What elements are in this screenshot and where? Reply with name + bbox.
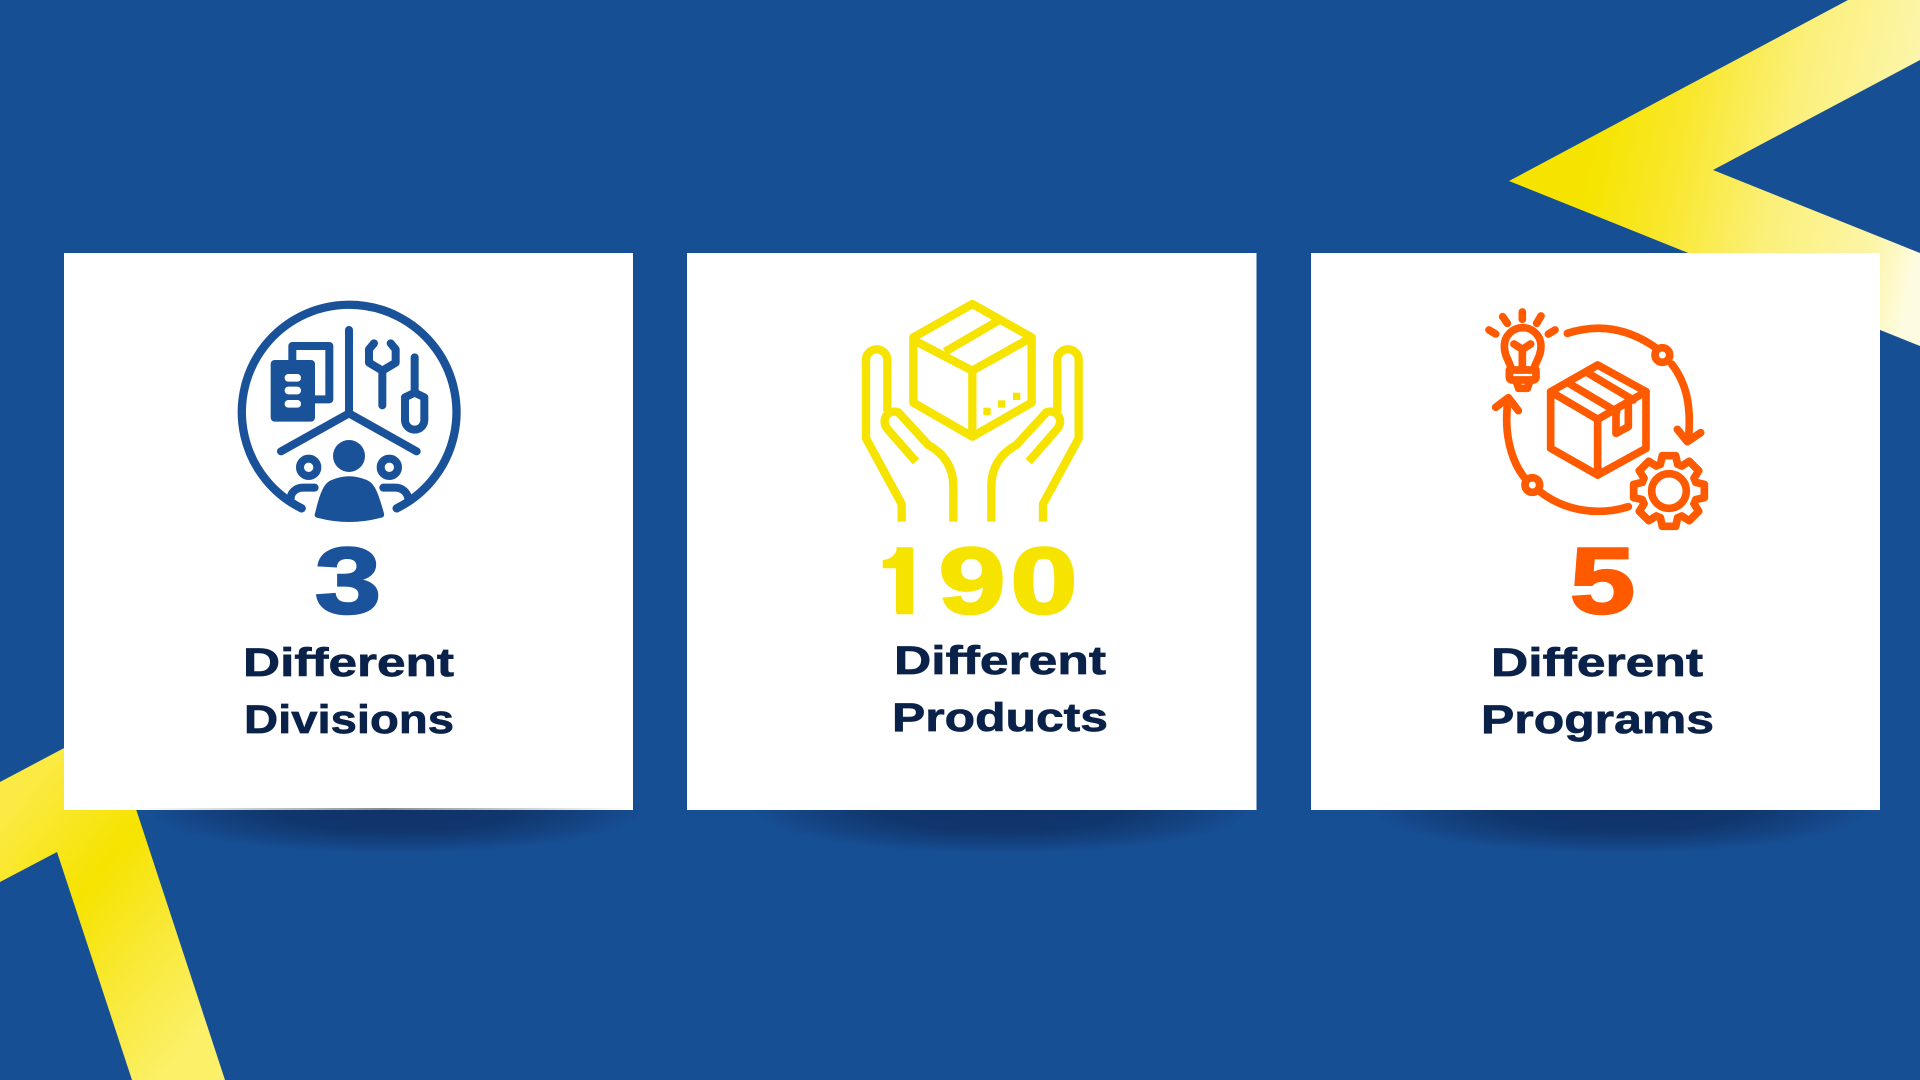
card background xyxy=(64,253,633,810)
icon: hands holding box xyxy=(866,304,1079,522)
icon: divisions, tools and people xyxy=(242,305,456,522)
shadow: under card 2 xyxy=(752,766,1252,854)
chevron: bottom left yellow xyxy=(0,729,225,1080)
number: 5: 5 xyxy=(1570,528,1635,633)
label: Different Products xyxy=(892,639,1108,740)
shadow: under card 3 xyxy=(1370,766,1870,854)
label: Different Programs: Different xyxy=(1491,641,1703,685)
number: 3: 3 xyxy=(315,528,381,633)
label: Different Divisions: Divisions xyxy=(244,698,454,742)
card bottom edge xyxy=(136,808,633,810)
label: Different Divisions: Different xyxy=(243,641,454,685)
number: 190: 190 xyxy=(867,528,1077,633)
label: Different Products: Products xyxy=(892,696,1108,740)
label: Different Programs xyxy=(1481,641,1714,742)
card background xyxy=(1311,253,1880,810)
chevron: top right yellow xyxy=(1509,0,1920,346)
panel: programs xyxy=(1311,253,1880,810)
label: Different Products: Different xyxy=(894,639,1106,683)
label: Different Programs: Programs xyxy=(1481,698,1714,742)
icon: box cycle with bulb and gear xyxy=(1489,312,1704,526)
panel: divisions xyxy=(64,253,633,810)
card background xyxy=(687,253,1256,810)
label: Different Divisions xyxy=(243,641,454,742)
panel: products xyxy=(687,253,1256,810)
shadow: under card 1 xyxy=(145,766,645,854)
